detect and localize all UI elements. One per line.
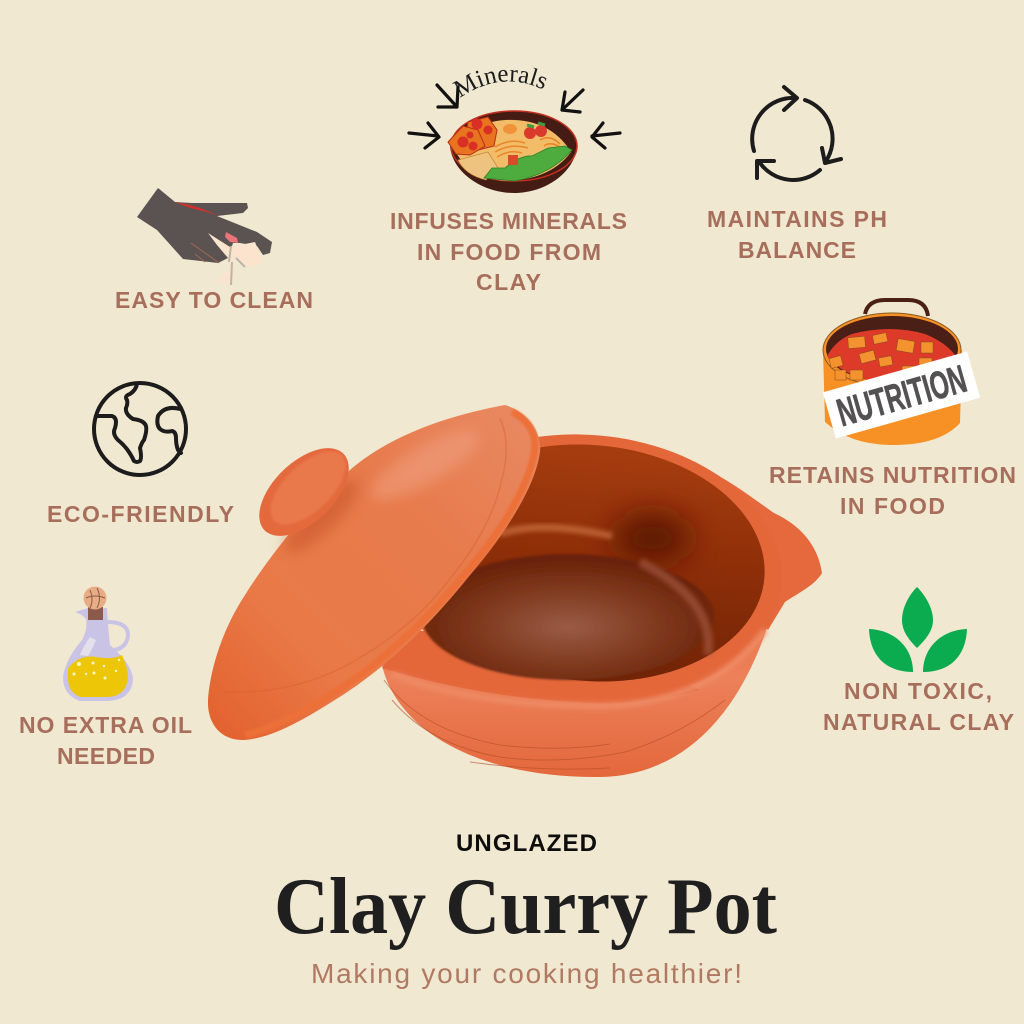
icon: nutrition pot [823, 300, 980, 445]
label: retains nutrition: RETAINS NUTRITION [769, 462, 1016, 488]
lid [208, 405, 540, 740]
label: non toxic natural clay: NATURAL CLAY [823, 709, 1014, 735]
label: no extra oil: NO EXTRA OIL [19, 712, 192, 738]
label: easy to clean: EASY TO CLEAN [115, 287, 313, 313]
heading: unglazed: UNGLAZED [456, 830, 597, 857]
lid flange edge [245, 412, 535, 735]
dark shadow in cavity [614, 514, 690, 562]
body grooves [384, 680, 725, 769]
label: no extra oil: NEEDED [57, 743, 155, 769]
bowl [450, 146, 577, 193]
title: Clay Curry Pot [274, 863, 777, 951]
label: retains nutrition [769, 462, 1016, 519]
pot body [381, 560, 768, 777]
nutrition banner [823, 351, 980, 439]
subtitle: Making your cooking healthier! [311, 958, 742, 989]
pot rim [382, 630, 700, 703]
label: retains nutrition: IN FOOD [840, 493, 945, 519]
label: infuses minerals: IN FOOD FROM [417, 239, 601, 265]
label: infuses minerals: CLAY [476, 269, 541, 295]
label: infuses minerals: INFUSES MINERALS [390, 208, 627, 234]
label: maintains ph balance: BALANCE [738, 237, 856, 263]
bowl food [456, 120, 571, 181]
cavity glare [500, 527, 612, 536]
icon: oil bottle [63, 586, 133, 701]
rim lower highlight [392, 630, 765, 706]
icon: hand with cloth [137, 188, 272, 285]
label: maintains ph balance [707, 206, 887, 263]
lid dome line [224, 418, 506, 692]
pot cavity [405, 430, 775, 696]
clay pot photo illustration [208, 405, 822, 777]
arched word Minerals: Minerals [452, 68, 546, 98]
label: non toxic natural clay: NON TOXIC, [844, 678, 992, 704]
icon: globe [94, 383, 186, 475]
knob shadow [276, 470, 368, 562]
icon: green leaves [869, 587, 967, 672]
pot rim ellipse [383, 419, 793, 717]
icon: minerals food bowl [407, 68, 622, 193]
mineral arrows [409, 85, 620, 148]
floor ring [640, 562, 709, 655]
pot handle [700, 466, 822, 630]
icon: cycle arrows [752, 87, 841, 180]
label: eco-friendly: ECO-FRIENDLY [47, 501, 234, 527]
cavity floor [422, 554, 714, 680]
label: infuses minerals [390, 208, 627, 295]
knob top [258, 439, 358, 537]
lid knob [244, 432, 364, 552]
label: non toxic natural clay [823, 678, 1014, 735]
lid sheen [362, 418, 488, 512]
label: no extra oil [19, 712, 192, 769]
label: maintains ph balance: MAINTAINS PH [707, 206, 887, 232]
